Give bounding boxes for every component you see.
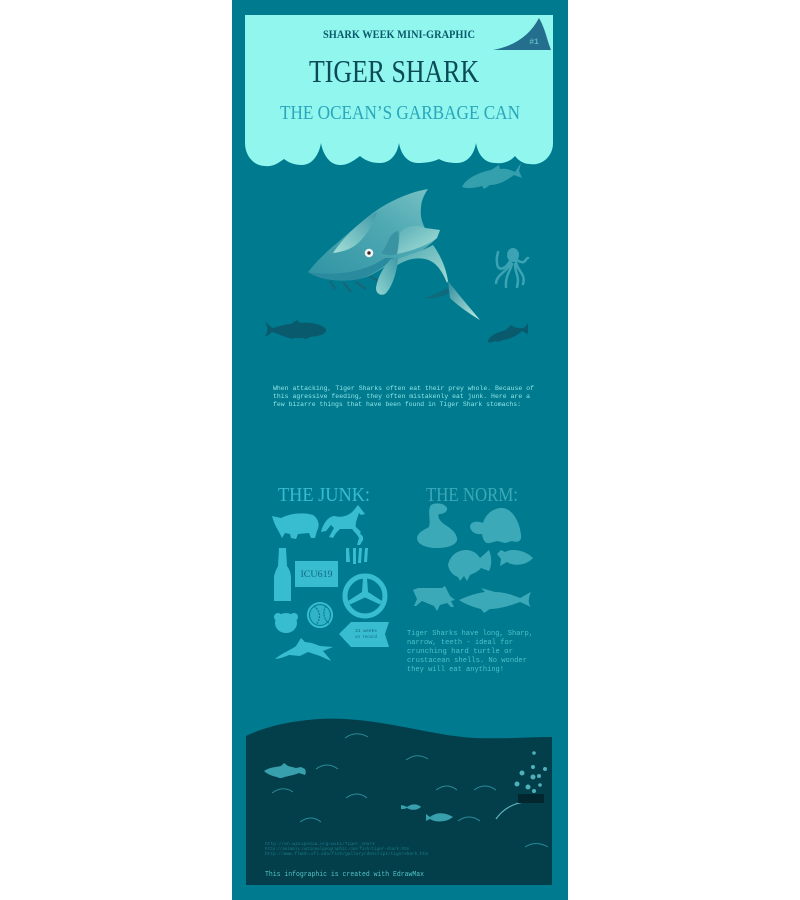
large bubble arc — [496, 802, 530, 819]
icon: teddy bear — [274, 613, 298, 633]
subtitle: THE OCEAN’S GARBAGE CAN — [280, 102, 520, 124]
icon: grasshopper — [413, 586, 455, 611]
background panel — [232, 0, 568, 900]
header panel — [245, 15, 553, 166]
icon: fish small — [497, 550, 533, 566]
icon: coiled snake — [417, 503, 457, 548]
source links: http://en.wikipedia.org/wiki/Tiger_shark — [265, 842, 376, 847]
icon: steering wheel — [345, 576, 385, 616]
gill notch — [381, 231, 399, 255]
icon: fish round — [448, 550, 491, 581]
norm paragraph: crustacean shells. No wonder — [407, 657, 527, 665]
norm paragraph: crunching hard turtle or — [407, 648, 513, 656]
source links: http://www.flmnh.ufl.edu/fish/gallery/descript/tigershark.htm — [265, 852, 429, 857]
norm paragraph: they will eat anything! — [407, 666, 504, 674]
junk icons — [272, 505, 389, 661]
icon: dark fish left — [265, 320, 326, 339]
icon: license plate: ICU619 — [300, 569, 333, 579]
icon: bottom fish large — [264, 763, 306, 778]
icon: fin badge: #1 — [529, 38, 539, 47]
icon: license plate — [295, 561, 338, 587]
tail lower fluke — [425, 288, 450, 298]
source links — [265, 842, 429, 857]
icon: bottom fish small — [401, 804, 421, 810]
intro paragraph: few bizarre things that have been found in Tiger Shark stomachs: — [273, 401, 521, 408]
title: TIGER SHARK — [309, 53, 479, 89]
pectoral fin — [376, 258, 398, 295]
norm paragraph: Tiger Sharks have long, Sharp, — [407, 630, 533, 638]
icon: octopus — [496, 248, 528, 287]
norm paragraph — [407, 630, 533, 674]
icon: dark fish right — [488, 323, 528, 342]
intro paragraph — [273, 385, 534, 408]
icon: bottom fish mid — [426, 813, 453, 821]
icon: ribbon sign — [339, 622, 389, 647]
source links: http://animals.nationalgeographic.com/fish/tiger-shark.htm — [265, 847, 409, 852]
icon: baseball — [308, 603, 332, 627]
teeth — [330, 276, 378, 292]
bubbles — [514, 751, 547, 793]
norm paragraph: narrow, teeth - ideal for — [407, 639, 513, 647]
heading: the norm: THE NORM: — [426, 484, 518, 506]
kicker: SHARK WEEK MINI-GRAPHIC — [323, 29, 475, 41]
icon: fish top — [462, 163, 522, 189]
rear body — [392, 245, 448, 283]
scalloped banner — [245, 15, 553, 166]
icon: turtle — [470, 508, 521, 543]
heading: the junk: THE JUNK: — [278, 484, 370, 506]
intro paragraph: this agressive feeding, they often mistakenly eat junk. Here are a — [273, 393, 530, 400]
ripple arcs — [272, 734, 548, 847]
bottom ocean panel — [246, 719, 552, 885]
belly shade — [308, 258, 394, 281]
body — [308, 189, 440, 281]
icon: eye — [365, 249, 373, 257]
icon: swimmer — [275, 638, 333, 661]
shark illustration — [308, 189, 480, 320]
icon: fish long — [459, 588, 531, 613]
icon: weathervane horse — [321, 505, 368, 564]
icon: ribbon sign: 31 weeks — [355, 628, 377, 634]
tail — [448, 281, 480, 320]
icon: fin badge — [493, 18, 551, 50]
norm icons — [413, 503, 533, 613]
dorsal highlight — [333, 212, 377, 253]
dark submarine — [518, 794, 544, 803]
rear head light area — [397, 226, 440, 254]
icon: bottle — [274, 548, 291, 601]
icon: pig — [272, 513, 319, 539]
icon: ribbon sign: on record — [355, 634, 377, 640]
ocean floor shape — [246, 719, 552, 885]
credit line: This infographic is created with EdrawMax — [265, 871, 424, 879]
intro paragraph: When attacking, Tiger Sharks often eat their prey whole. Because of — [273, 385, 534, 392]
